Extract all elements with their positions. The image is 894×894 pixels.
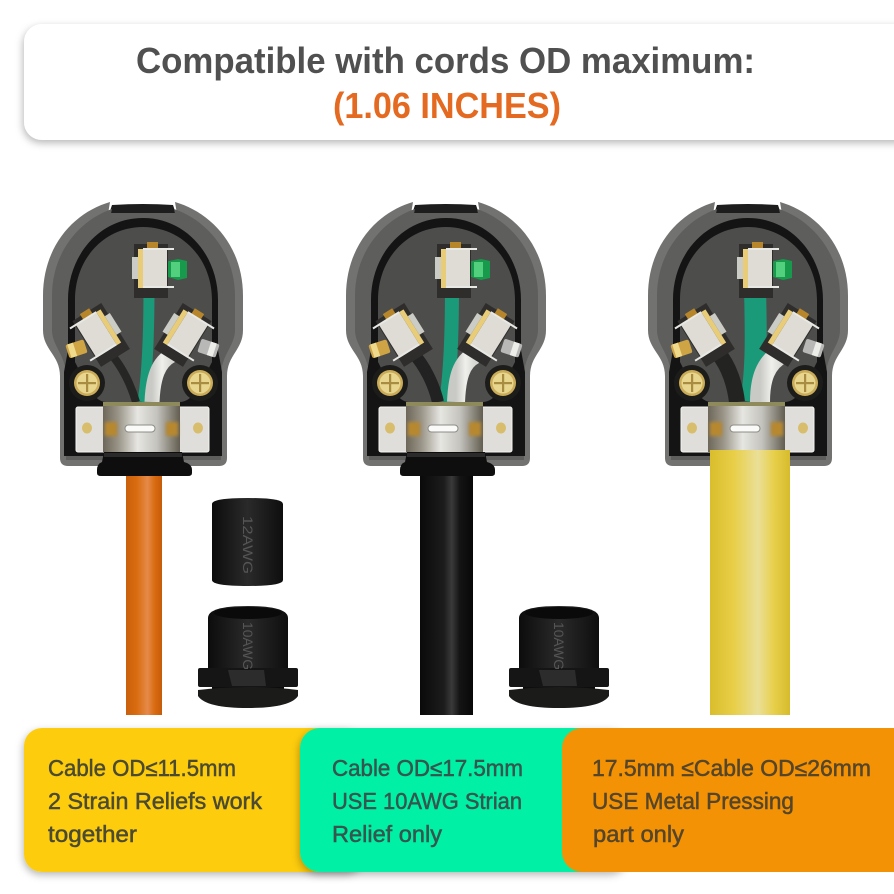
- strain relief 10AWG, first: [198, 606, 298, 708]
- info cards: [24, 728, 894, 872]
- yellow card text: together: [48, 821, 137, 847]
- header banner: [24, 24, 894, 140]
- orange cable: [126, 470, 162, 715]
- heading: Compatible with cords OD maximum:: [136, 40, 755, 81]
- strain relief 12AWG: [212, 498, 283, 586]
- wires: [110, 288, 172, 402]
- yellow card text: 2 Strain Reliefs work: [48, 788, 262, 814]
- plug 2 with black cable: [346, 202, 546, 715]
- green card text: USE 10AWG Strian: [332, 788, 522, 814]
- orange card text: [592, 755, 871, 847]
- orange card text: part only: [593, 821, 685, 847]
- strain relief 12AWG: 12AWG: [240, 516, 256, 574]
- maximum diameter value: (1.06 INCHES): [333, 85, 561, 126]
- plug 3 with yellow cable: [648, 202, 848, 715]
- strain relief 10AWG, second: [509, 606, 609, 708]
- orange card text: USE Metal Pressing: [592, 788, 794, 814]
- yellow card text: Cable OD≤11.5mm: [48, 755, 236, 781]
- green card text: Cable OD≤17.5mm: [332, 755, 523, 781]
- green card text: [332, 755, 523, 847]
- green card text: Relief only: [332, 821, 443, 847]
- black cable: [420, 470, 473, 715]
- wires: [413, 288, 475, 402]
- yellow card text: [48, 755, 262, 847]
- yellow cable: [710, 450, 790, 715]
- wires: [718, 288, 783, 402]
- orange card text: 17.5mm ≤Cable OD≤26mm: [592, 755, 871, 781]
- plug 1 with orange cable: [43, 202, 243, 715]
